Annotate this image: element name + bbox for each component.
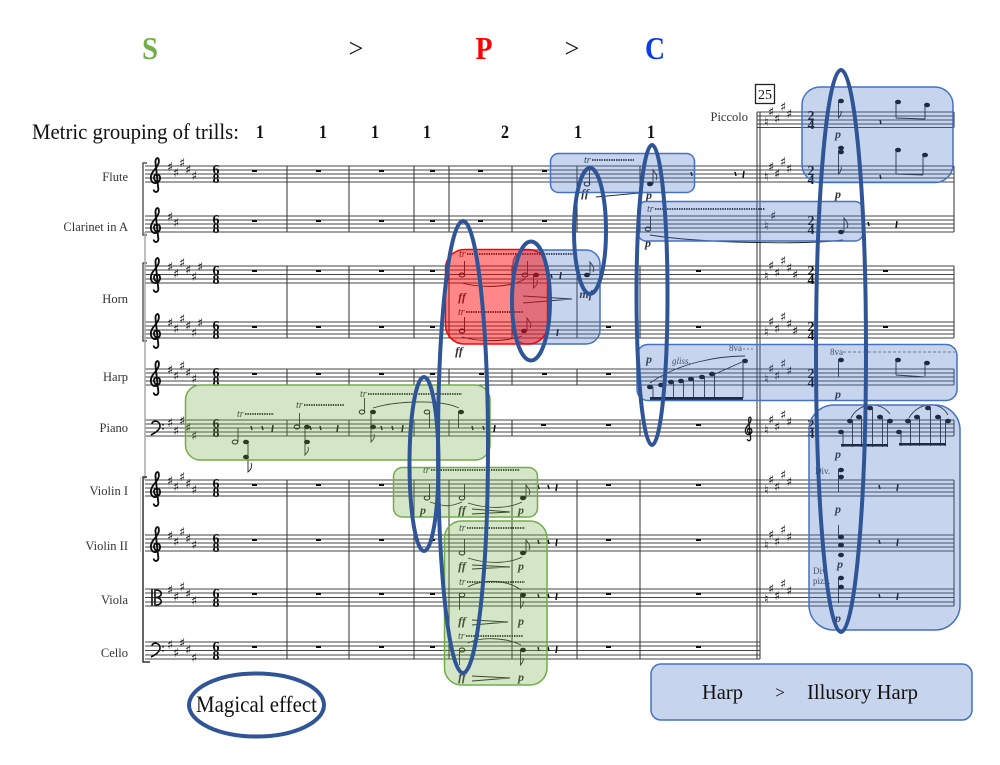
instrument labels bbox=[63, 110, 748, 660]
dynamics and performance marks: ff bbox=[458, 503, 467, 517]
time signatures: 2 bbox=[808, 164, 814, 179]
instrument labels: Horn bbox=[102, 292, 129, 306]
dynamics and performance marks: p bbox=[419, 503, 426, 517]
dynamics and performance marks: Div. bbox=[815, 466, 830, 476]
instrument labels: Violin I bbox=[90, 484, 128, 498]
whole-bar rests bbox=[252, 170, 888, 648]
dynamics and performance marks: p bbox=[834, 187, 841, 201]
dynamics and performance marks: ff bbox=[458, 559, 467, 573]
staff lines bbox=[145, 112, 954, 659]
time signatures: 6 bbox=[212, 163, 220, 178]
highlight: clarinet C blue bbox=[638, 202, 863, 241]
ellipse: harp and flute attack bbox=[636, 145, 668, 445]
dynamics and performance marks: p bbox=[834, 502, 841, 516]
dynamics and performance marks: p bbox=[517, 503, 524, 517]
dynamics and performance marks: 8va bbox=[830, 347, 843, 357]
bar lines bbox=[287, 112, 954, 659]
time signatures: 8 bbox=[212, 426, 220, 441]
dynamics and performance marks: p bbox=[517, 670, 524, 684]
time signatures: 6 bbox=[212, 319, 220, 334]
filled noteheads bbox=[243, 99, 951, 652]
trills bbox=[237, 155, 765, 642]
key signatures: ♮♯♯♯♯♯ bbox=[764, 253, 798, 283]
time signatures: 2 bbox=[808, 214, 814, 229]
time signatures: 2 bbox=[808, 418, 814, 433]
dynamics and performance marks: p bbox=[517, 614, 524, 628]
highlight: harp C blue bbox=[637, 344, 957, 400]
key signatures: ♮♯♯♯♯ bbox=[764, 407, 792, 437]
time signatures: 8 bbox=[212, 541, 220, 556]
time signatures: 6 bbox=[212, 587, 220, 602]
stems, flags and slurs bbox=[238, 101, 948, 681]
dynamics and performance marks: Div. bbox=[813, 566, 828, 576]
instrument labels: Violin II bbox=[85, 539, 128, 553]
dynamics and performance marks: p bbox=[834, 611, 841, 625]
highlight: piccolo and flute blue bbox=[802, 87, 953, 182]
trills: tr bbox=[458, 307, 465, 318]
metric grouping label and numbers: 1 bbox=[574, 122, 582, 143]
rehearsal mark 25: 25 bbox=[758, 88, 772, 103]
instrument labels: Flute bbox=[102, 170, 128, 184]
key signatures: ♮♯♯♯♯ bbox=[764, 99, 792, 129]
dynamics and performance marks: 8va bbox=[729, 343, 742, 353]
dynamics and performance marks: ff bbox=[581, 186, 590, 200]
key signatures: ♮♯ bbox=[764, 208, 776, 233]
time signatures: 4 bbox=[808, 376, 814, 391]
time signatures: 8 bbox=[212, 596, 220, 611]
trills: tr bbox=[459, 577, 466, 588]
time signatures: 8 bbox=[212, 172, 220, 187]
key signatures: ♯♯♯♯♯ bbox=[167, 469, 197, 497]
trills: tr bbox=[584, 155, 591, 166]
key signatures: ♯♯♯♯♯ bbox=[167, 524, 197, 552]
key signatures: ♮♯♯♯♯ bbox=[764, 522, 792, 552]
time signatures: 8 bbox=[212, 486, 220, 501]
time signatures: 6 bbox=[212, 532, 220, 547]
time signatures: 8 bbox=[212, 375, 220, 390]
time signatures: 4 bbox=[808, 173, 814, 188]
trills: tr bbox=[296, 400, 303, 411]
key signatures: ♮♯♯♯♯ bbox=[764, 356, 792, 386]
highlight: horn P red bbox=[446, 250, 548, 344]
trills: tr bbox=[423, 465, 430, 476]
time signatures: 2 bbox=[808, 109, 814, 124]
metric grouping label and numbers: 2 bbox=[501, 122, 509, 143]
time signatures: 6 bbox=[212, 640, 220, 655]
key signatures: ♯♯♯♯♯♯ bbox=[167, 311, 203, 340]
highlight: illusory harp strings blue bbox=[809, 405, 960, 630]
rehearsal mark 25 bbox=[756, 84, 774, 104]
time signatures bbox=[212, 109, 814, 664]
key signatures: ♯♯ bbox=[167, 209, 179, 230]
beams bbox=[650, 397, 946, 446]
time signatures: 2 bbox=[808, 367, 814, 382]
metric grouping label and numbers: 1 bbox=[371, 122, 379, 143]
ellipse: strings onset bbox=[438, 221, 488, 673]
heading: S > P > C hierarchy: S bbox=[142, 30, 158, 66]
highlight: flute C blue bbox=[550, 154, 694, 192]
trills: tr bbox=[237, 409, 244, 420]
dynamics and performance marks: p bbox=[645, 352, 652, 366]
time signatures: 6 bbox=[212, 477, 220, 492]
instrument labels: Piano bbox=[100, 421, 128, 435]
time signatures: 4 bbox=[808, 273, 814, 288]
dynamics and performance marks: p bbox=[517, 559, 524, 573]
key signatures: ♮♯♯♯♯ bbox=[764, 576, 792, 606]
clefs bbox=[151, 158, 752, 657]
time signatures: 4 bbox=[808, 427, 814, 442]
callout: magical effect bbox=[189, 674, 324, 736]
key signatures: ♯♯♯♯♯ bbox=[167, 358, 197, 386]
instrument labels: Viola bbox=[101, 593, 128, 607]
metric grouping label and numbers: 1 bbox=[423, 122, 431, 143]
ellipse: violin I onset bbox=[410, 377, 438, 551]
heading: S > P > C hierarchy: P bbox=[476, 30, 492, 66]
dynamics and performance marks: ff bbox=[458, 614, 467, 628]
instrument labels: Harp bbox=[103, 370, 128, 384]
trills: tr bbox=[459, 249, 466, 260]
dynamics and performance marks: pizz. bbox=[813, 576, 830, 586]
trills: tr bbox=[458, 631, 465, 642]
highlight: horn C blue bbox=[513, 250, 600, 344]
dynamics and performance marks: mf bbox=[579, 287, 594, 301]
key signatures: ♮♯♯♯♯ bbox=[764, 467, 792, 497]
trills: tr bbox=[647, 204, 654, 215]
key signatures: ♯♯♯♯♯ bbox=[167, 155, 197, 183]
time signatures: 6 bbox=[212, 366, 220, 381]
callout: magical effect: Magical effect bbox=[196, 692, 318, 717]
time signatures: 6 bbox=[212, 417, 220, 432]
instrument labels: Cello bbox=[101, 646, 128, 660]
dynamics and performance marks: p bbox=[836, 557, 843, 571]
instrument labels: Clarinet in A bbox=[63, 220, 128, 234]
instrument labels: Piccolo bbox=[710, 110, 748, 124]
legend: Harp > Illusory Harp: Harp bbox=[702, 680, 743, 704]
ellipse: piccolo to viola attack bbox=[816, 70, 866, 632]
small rests after notes bbox=[251, 120, 898, 653]
ellipse: flute onset bbox=[574, 168, 606, 294]
legend: Harp > Illusory Harp: > bbox=[775, 683, 785, 702]
time signatures: 6 bbox=[212, 213, 220, 228]
metric grouping label and numbers bbox=[32, 119, 655, 144]
dynamics and performance marks: ff bbox=[455, 344, 464, 358]
time signatures: 2 bbox=[808, 320, 814, 335]
key signatures: ♯♯♯♯♯ bbox=[167, 635, 197, 665]
dynamics and performance marks: p bbox=[834, 127, 841, 141]
key signatures bbox=[167, 99, 798, 665]
trills: tr bbox=[459, 523, 466, 534]
dynamics and performance marks: ff bbox=[458, 670, 467, 684]
dynamics and performance marks: gliss. bbox=[672, 356, 691, 366]
key signatures: ♯♯♯♯♯♯ bbox=[167, 255, 203, 284]
heading: S > P > C hierarchy: C bbox=[645, 30, 665, 66]
time signatures: 8 bbox=[212, 273, 220, 288]
heading: S > P > C hierarchy: > bbox=[565, 34, 579, 63]
metric grouping label and numbers: 1 bbox=[256, 122, 264, 143]
ellipse: horn cutoff bbox=[512, 242, 550, 360]
open noteheads bbox=[232, 182, 651, 652]
dynamics and performance marks bbox=[419, 127, 955, 684]
trills: tr bbox=[360, 389, 367, 400]
dynamics and performance marks: p bbox=[834, 447, 841, 461]
key signatures: ♮♯♯♯♯♯ bbox=[764, 309, 798, 339]
highlight: violin I S green bbox=[394, 468, 538, 517]
time signatures: 6 bbox=[212, 264, 220, 279]
highlight: piano S green bbox=[186, 385, 490, 460]
highlight: lower strings S green bbox=[444, 521, 547, 685]
dynamics and performance marks: p bbox=[645, 188, 652, 202]
legend: Harp > Illusory Harp: Illusory Harp bbox=[807, 680, 918, 704]
key signatures: ♯♯♯♯♯ bbox=[167, 413, 197, 443]
legend: Harp > Illusory Harp bbox=[651, 664, 972, 720]
time signatures: 4 bbox=[808, 223, 814, 238]
staff brackets bbox=[143, 163, 147, 341]
dynamics and performance marks: p bbox=[834, 387, 841, 401]
key signatures: ♯♯♯♯♯ bbox=[167, 579, 197, 608]
time signatures: 2 bbox=[808, 264, 814, 279]
metric grouping label and numbers: Metric grouping of trills: bbox=[32, 119, 239, 144]
time signatures: 8 bbox=[212, 222, 220, 237]
musical score bbox=[140, 99, 955, 684]
time signatures: 4 bbox=[808, 118, 814, 133]
time signatures: 8 bbox=[212, 328, 220, 343]
heading: S > P > C hierarchy: > bbox=[349, 34, 363, 63]
metric grouping label and numbers: 1 bbox=[319, 122, 327, 143]
dynamics and performance marks: ff bbox=[458, 290, 467, 304]
time signatures: 8 bbox=[212, 649, 220, 664]
key signatures: ♮♯♯♯♯ bbox=[764, 154, 792, 184]
dynamics and performance marks: p bbox=[644, 236, 651, 250]
heading: S > P > C hierarchy bbox=[142, 30, 665, 66]
time signatures: 4 bbox=[808, 329, 814, 344]
metric grouping label and numbers: 1 bbox=[647, 122, 655, 143]
